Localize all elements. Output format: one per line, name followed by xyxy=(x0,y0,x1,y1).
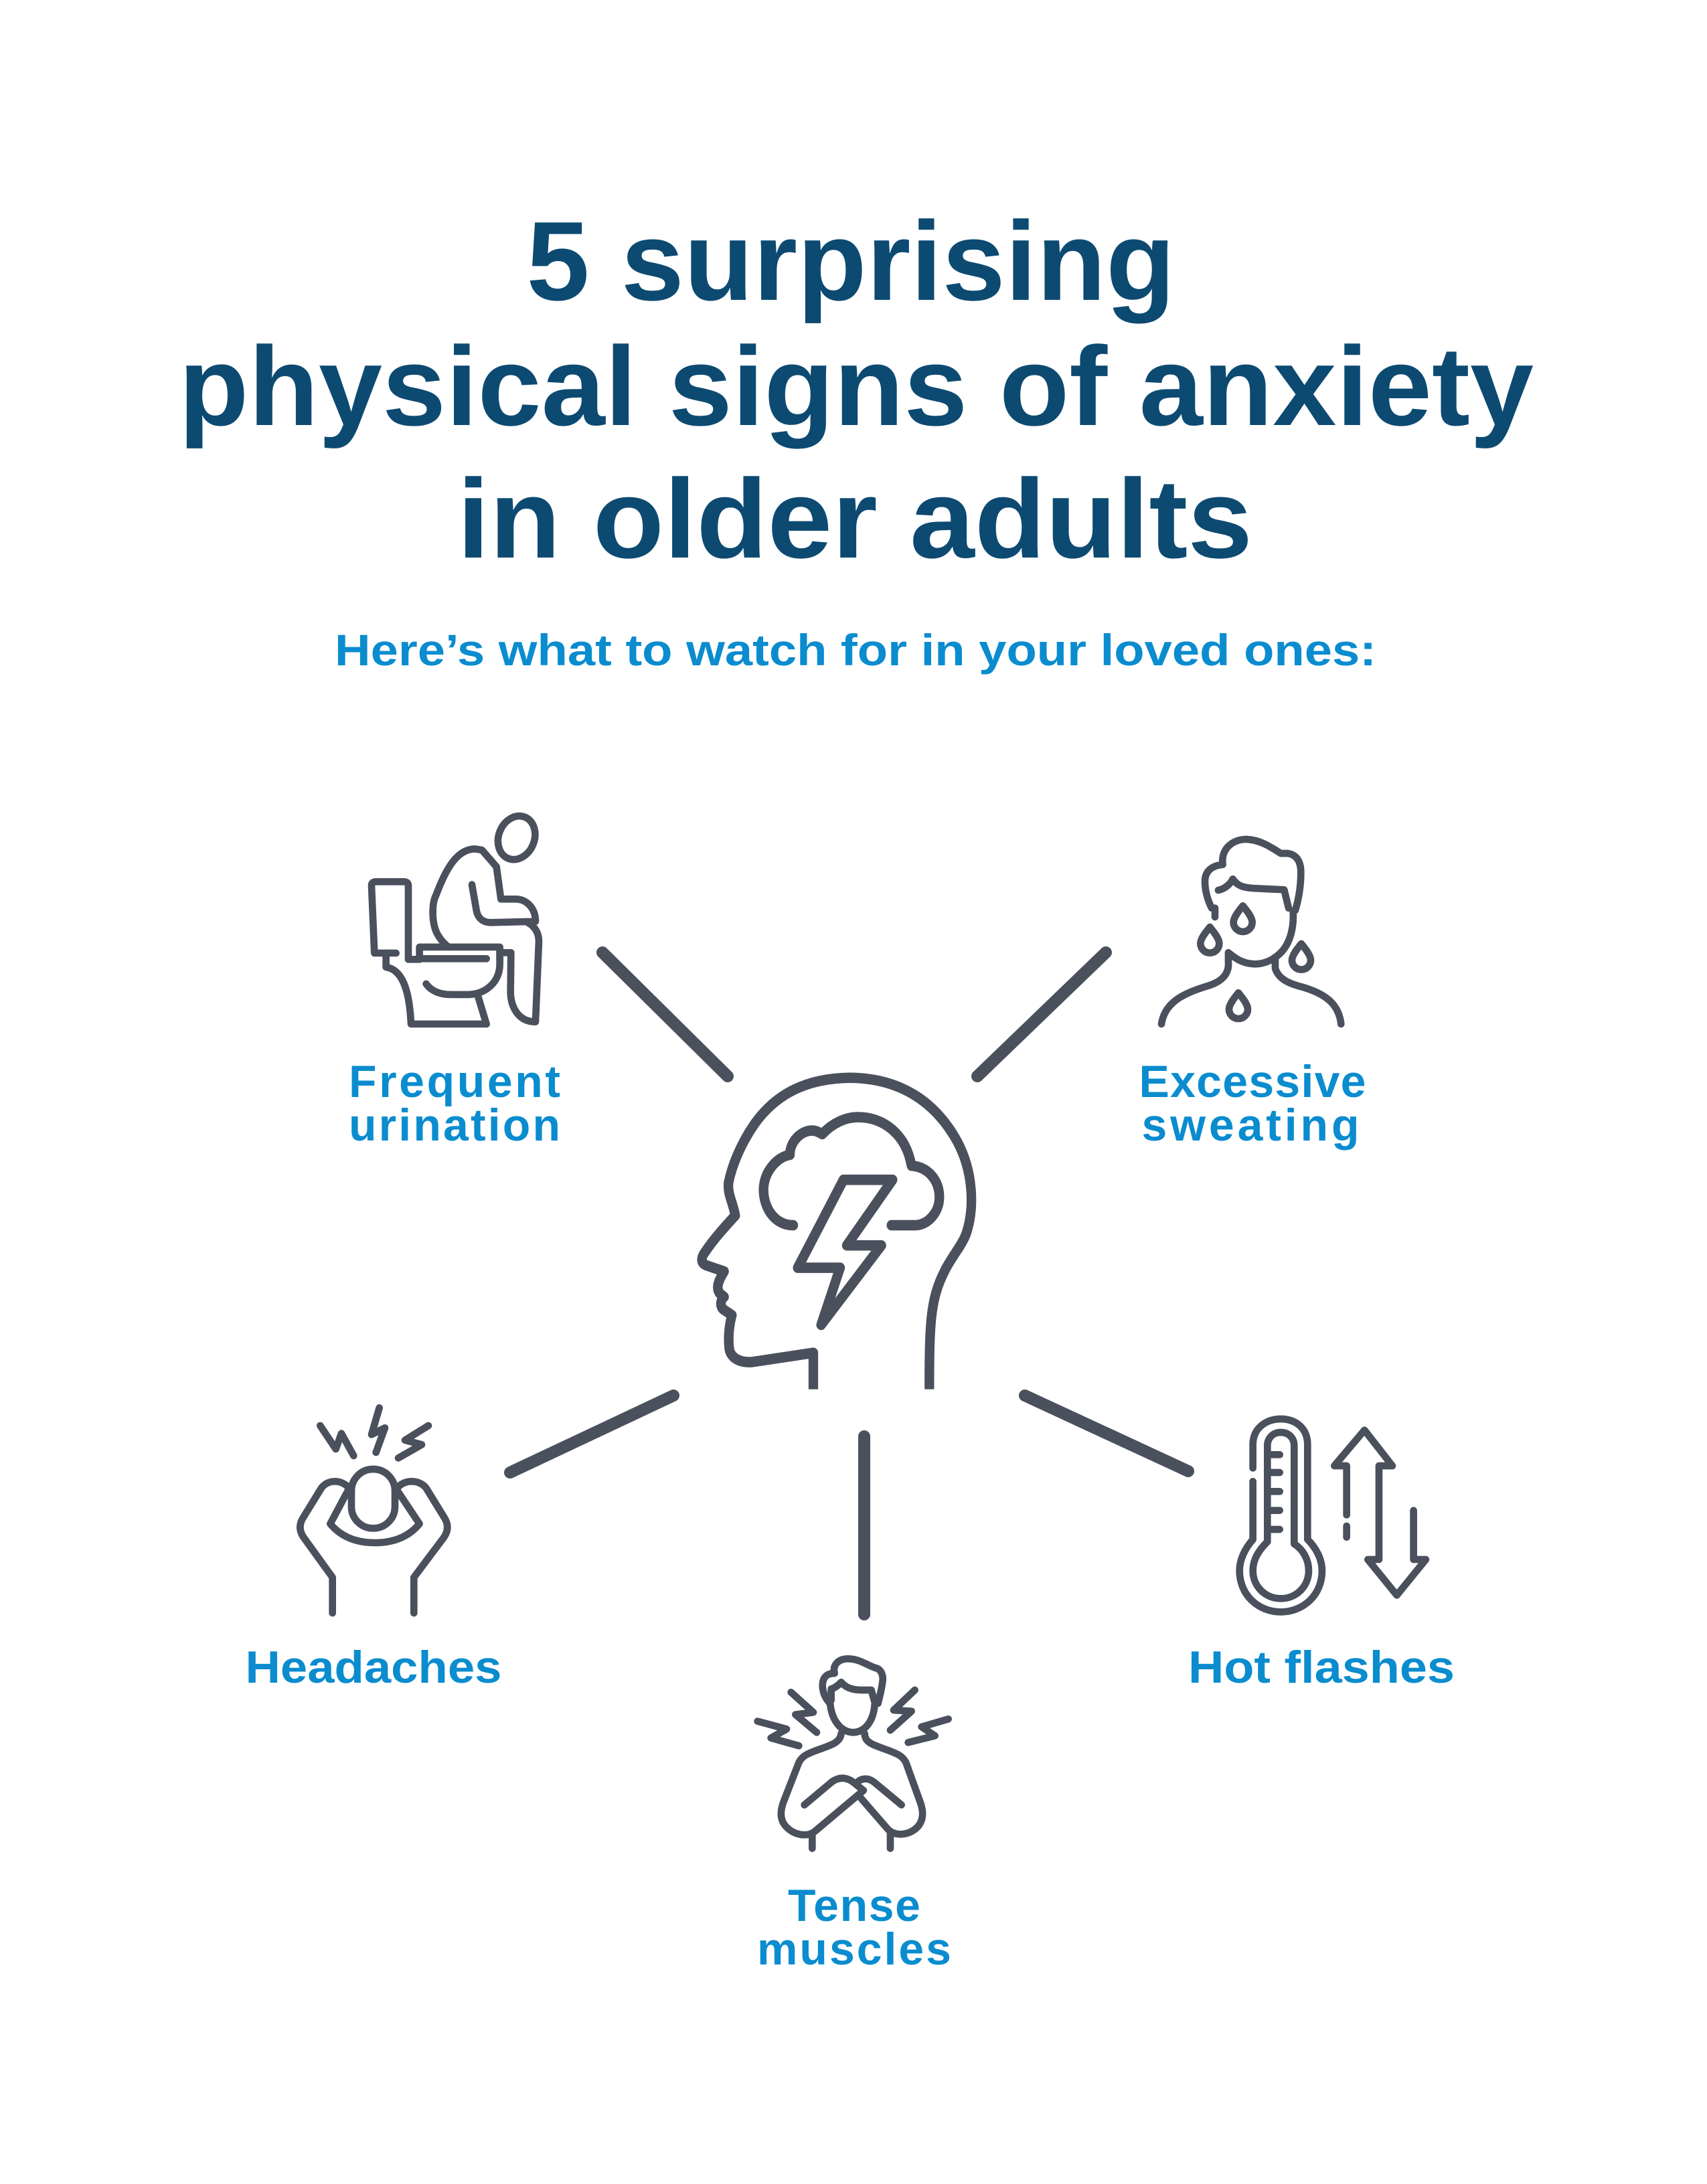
icon: thermometer with arrows xyxy=(1240,1419,1426,1612)
title: 5 surprising xyxy=(526,198,1175,324)
label: excessive sweating: sweating xyxy=(1142,1100,1359,1151)
icon: tense muscles xyxy=(758,1659,949,1849)
icon: head with storm cloud xyxy=(702,1078,971,1390)
subtitle: Here’s what to watch for in your loved ones: xyxy=(335,625,1376,675)
label: frequent urination: urination xyxy=(349,1100,560,1151)
label: tense muscles: muscles xyxy=(757,1924,951,1975)
title: in older adults xyxy=(457,456,1252,582)
title: physical signs of anxiety xyxy=(179,323,1534,449)
connector lines xyxy=(510,952,1188,1614)
icon: headache xyxy=(300,1408,447,1613)
label: tense muscles: Tense xyxy=(788,1880,920,1931)
title xyxy=(179,198,1534,582)
label: excessive sweating: Excessive xyxy=(1139,1056,1366,1107)
label: headaches: Headaches xyxy=(245,1642,502,1693)
icon: toilet xyxy=(372,811,542,1024)
icon: sweating person xyxy=(1161,839,1341,1024)
label: frequent urination: Frequent xyxy=(349,1056,560,1107)
label: hot flashes: Hot flashes xyxy=(1188,1642,1455,1693)
